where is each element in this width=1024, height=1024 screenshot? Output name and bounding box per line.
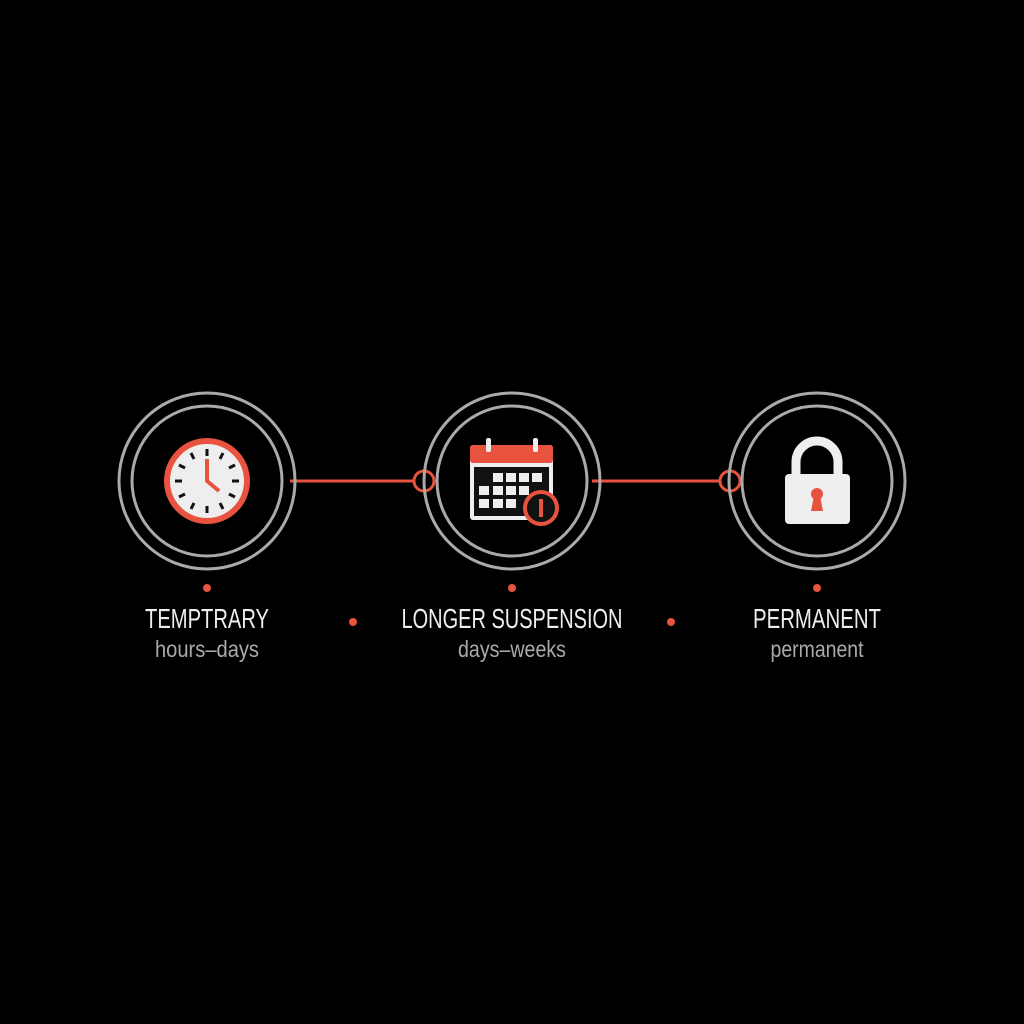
icon: clock [167,441,247,521]
icon: lock [785,441,850,524]
stage 3: permanent [729,393,905,662]
dot between 2 and 3 [667,618,675,626]
stage 1: temporary [119,393,295,662]
stage 1: temporary: TEMPTRARY [145,603,269,634]
dot between 1 and 2 [349,618,357,626]
stage 2: longer suspension: days–weeks [458,636,566,662]
stage 1: temporary: hours–days [155,636,259,662]
connector: line 1 [290,471,434,491]
icon: calendar [470,438,557,524]
stage 3: permanent: permanent [770,636,864,662]
stage 2: longer suspension: LONGER SUSPENSION [402,603,622,634]
connector: line 2 [592,471,740,491]
stage 3: permanent: PERMANENT [753,603,881,634]
stage 2: longer suspension [402,393,622,662]
